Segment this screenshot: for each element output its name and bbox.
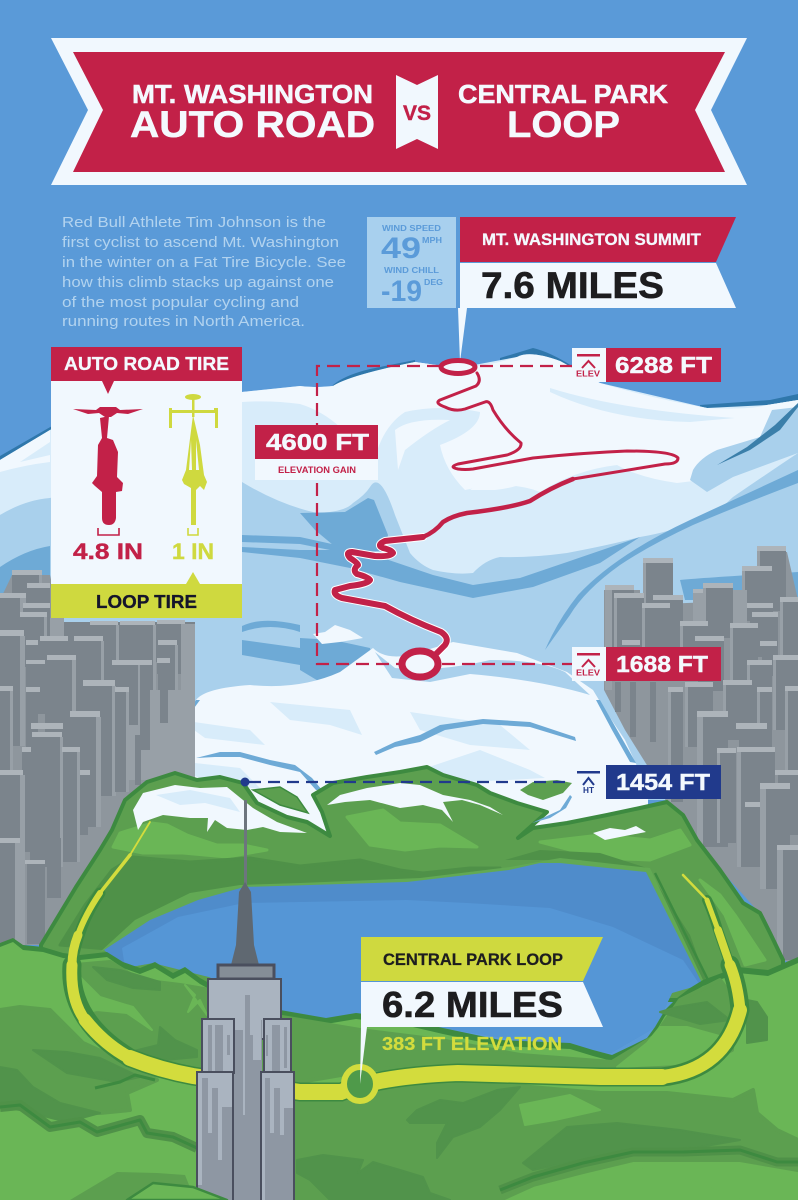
wind stats box xyxy=(367,217,456,308)
illustration: left city skyline xyxy=(0,570,195,945)
panel: tire comparison: AUTO ROAD TIRE xyxy=(64,353,229,374)
icon: fat tire width bracket xyxy=(98,528,119,535)
wind stats box: MPH xyxy=(422,236,442,245)
intro paragraph: in the winter on a Fat Tire Bicycle. See xyxy=(62,254,346,271)
elevation tag 6288 ft: ELEV xyxy=(576,370,601,378)
route: Mt. Washington Auto Road xyxy=(335,373,678,657)
heading: Mt. Washington Auto Road: AUTO ROAD xyxy=(130,104,375,145)
callout: Central Park Loop: 6.2 MILES xyxy=(382,984,563,1025)
wind stats box: DEG xyxy=(424,278,443,287)
greenery: lowland ridge lines xyxy=(0,1105,197,1148)
illustration: right city skyline xyxy=(604,546,798,965)
icon: road tire width bracket xyxy=(188,528,198,535)
icon: road bike frame gap xyxy=(189,440,199,470)
wind stats box: WIND CHILL xyxy=(384,265,439,275)
vs ribbon xyxy=(396,75,438,149)
header banner xyxy=(51,38,747,185)
height line to Empire State spire xyxy=(240,778,572,786)
heading: Central Park Loop xyxy=(458,79,668,145)
intro paragraph: first cyclist to ascend Mt. Washington xyxy=(62,234,339,251)
panel: tire comparison xyxy=(51,347,242,618)
marker: loop start ring xyxy=(344,1067,376,1101)
illustration: snow patches on park hills xyxy=(133,783,646,840)
callout: Mt. Washington Summit: 7.6 MILES xyxy=(481,265,664,306)
intro paragraph xyxy=(62,214,346,330)
wind stats box: 49 xyxy=(381,232,421,265)
heading: Central Park Loop: LOOP xyxy=(507,104,620,145)
intro paragraph: of the most popular cycling and xyxy=(62,294,299,311)
intro paragraph: Red Bull Athlete Tim Johnson is the xyxy=(62,214,326,231)
callout: Central Park Loop xyxy=(360,937,603,1084)
elevation gain label xyxy=(255,425,378,480)
illustration: park foreground greenery xyxy=(0,938,798,1200)
elevation tag 1688 ft xyxy=(572,647,721,681)
callout: Central Park Loop: CENTRAL PARK LOOP xyxy=(383,951,563,969)
greenery: darker shade patches xyxy=(0,967,767,1200)
elevation gain dashed bracket xyxy=(317,366,572,664)
value: 4.8 in: 4.8 IN xyxy=(73,539,143,564)
callout: Mt. Washington Summit xyxy=(458,217,736,362)
heading: Central Park Loop: CENTRAL PARK xyxy=(458,79,668,109)
route: Central Park loop yellow line xyxy=(72,822,740,1092)
elevation tag 6288 ft: 6288 FT xyxy=(615,352,713,378)
icon: fat tire bike xyxy=(73,407,143,525)
illustration: small green knolls in snow xyxy=(253,780,572,823)
elevation tag 1688 ft: 1688 FT xyxy=(616,651,709,677)
icon: road bike xyxy=(169,394,218,525)
heading: Mt. Washington Auto Road xyxy=(130,79,375,145)
greenery: lighter highlights xyxy=(80,977,723,1125)
height tag 1454 ft: HT xyxy=(583,786,594,795)
illustration: lower snow slope xyxy=(125,642,648,840)
callout: Central Park Loop: 383 FT ELEVATION xyxy=(382,1034,562,1054)
illustration: green park hills xyxy=(41,767,783,1000)
vs ribbon: VS xyxy=(403,102,431,125)
callout: Mt. Washington Summit: MT. WASHINGTON SUMMIT xyxy=(482,230,702,249)
wind stats box: -19 xyxy=(381,275,422,308)
height tag 1454 ft: 1454 FT xyxy=(616,769,711,795)
elevation tag 6288 ft xyxy=(572,348,721,382)
panel: tire comparison: LOOP TIRE xyxy=(96,591,197,612)
illustration: snowy Mt. Washington xyxy=(0,348,798,800)
intro paragraph: running routes in North America. xyxy=(62,313,305,330)
elevation gain label: ELEVATION GAIN xyxy=(278,465,356,476)
illustration: foreground bush xyxy=(127,1183,227,1200)
illustration: Empire State Building xyxy=(197,800,294,1200)
illustration: lake xyxy=(104,863,702,1053)
elevation tag 1688 ft: ELEV xyxy=(576,668,601,678)
greenery: mid-green masses xyxy=(0,962,798,1200)
heading: Mt. Washington Auto Road: MT. WASHINGTON xyxy=(132,79,373,109)
intro paragraph: how this climb stacks up against one xyxy=(62,274,334,291)
height tag 1454 ft xyxy=(572,765,721,799)
route: Central Park loop xyxy=(72,893,740,1092)
wind stats box: WIND SPEED xyxy=(382,223,441,233)
value: 1 in: 1 IN xyxy=(172,539,214,564)
elevation gain label: 4600 FT xyxy=(266,429,370,455)
marker: base xyxy=(402,651,438,677)
marker: summit xyxy=(441,360,475,374)
